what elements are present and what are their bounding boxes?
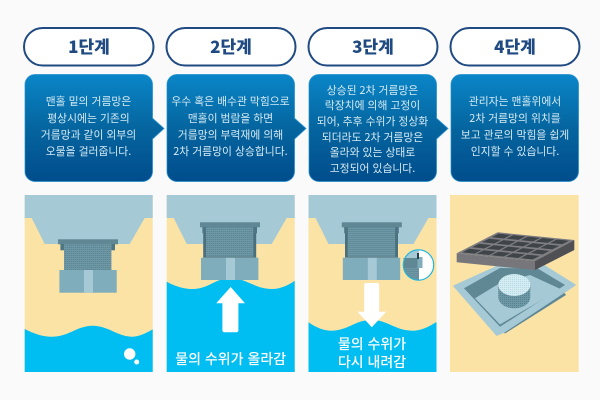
step 2 description box: 거름망의 부력재에 의해 (178, 126, 283, 142)
step 3 heading: 3단계 (352, 33, 394, 58)
water (308, 320, 436, 372)
step 3 heading (308, 28, 438, 66)
filter cylinder (498, 274, 530, 308)
step 3 description box (309, 74, 448, 182)
step 4 heading: 4단계 (494, 33, 536, 58)
water (25, 326, 153, 372)
panel: step 2 illustration (167, 195, 295, 372)
arrow up (216, 287, 245, 332)
step 2 heading (166, 28, 296, 66)
step 3 description box: 락장치에 의해 고정이 (325, 97, 420, 113)
step 3 description box: 올라와 있는 상태로 (330, 144, 415, 160)
raised filter device (200, 222, 260, 280)
water level label: 물의 수위가 올라감 (175, 349, 286, 369)
water level label: 다시 내려감 (338, 352, 406, 372)
manhole frame (454, 265, 575, 335)
filter device (58, 239, 118, 293)
arrow down (358, 283, 386, 327)
panel: step 3 illustration (308, 195, 436, 372)
step 1 description box: 맨홀 밑의 거름망은 (46, 93, 131, 109)
step 4 description box: 인지할 수 있습니다. (471, 143, 559, 159)
step 3 description box: 상승된 2차 거름망은 (327, 82, 418, 98)
step 1 description box: 평상시에는 기존의 (47, 110, 130, 126)
step 1 description box: 거름망과 같이 외부의 (41, 126, 136, 142)
step 1 description box (25, 74, 164, 182)
step 4 heading (450, 28, 580, 66)
step 3 description box: 되더라도 2차 거름망은 (322, 129, 423, 145)
step 1 heading (24, 28, 154, 66)
bubbles (124, 348, 139, 364)
step 1 heading: 1단계 (68, 33, 110, 58)
raised filter device (342, 222, 402, 280)
step 4 description box (451, 74, 578, 182)
water (167, 278, 295, 372)
step 4 description box: 보고 관로의 막힘을 쉽게 (461, 126, 569, 142)
step 2 heading: 2단계 (210, 33, 252, 58)
step 2 description box: 맨홀이 범람을 하면 (188, 110, 273, 126)
step 4 description box: 관리자는 맨홀위에서 (469, 93, 561, 109)
step 3 description box: 되어, 추후 수위가 정상화 (317, 113, 428, 129)
water level label: 물의 수위가 (338, 334, 406, 354)
panel: step 4 illustration (450, 195, 579, 372)
grate cover (457, 232, 574, 270)
inset: lock detail (403, 250, 434, 280)
step 4 description box: 2차 거름망의 위치를 (469, 110, 561, 126)
step 3 description box: 고정되어 있습니다. (330, 160, 415, 176)
step 2 description box (167, 74, 306, 182)
water level label (338, 334, 406, 372)
panel: step 1 illustration (25, 195, 153, 372)
step 1 description box: 오물을 걸러줍니다. (46, 143, 131, 159)
step 2 description box: 2차 거름망이 상승합니다. (173, 143, 288, 159)
step 2 description box: 우수 혹은 배수관 막힘으로 (171, 93, 290, 109)
